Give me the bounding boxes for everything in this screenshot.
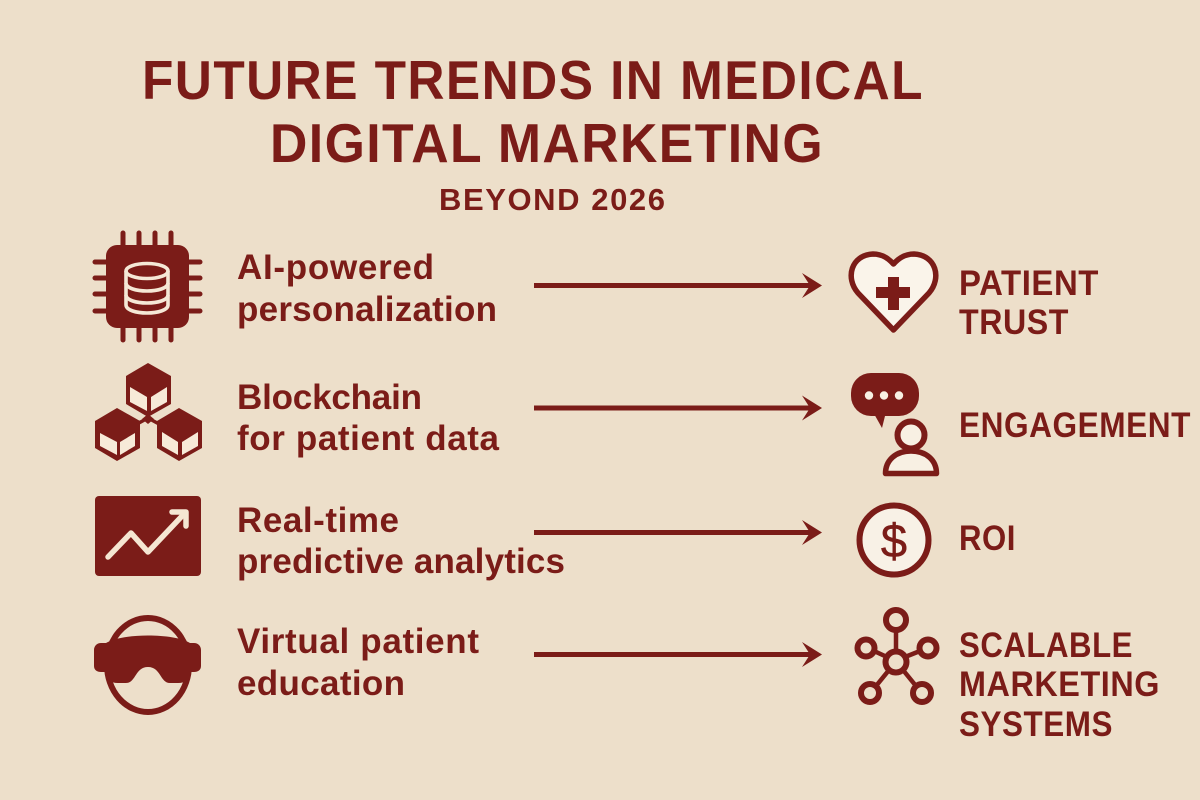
label: blockchain for patient data: for patient data bbox=[237, 419, 500, 458]
label: scalable marketing systems: MARKETING bbox=[959, 665, 1160, 704]
arrow: virtual education to scalable systems bbox=[534, 642, 822, 667]
label: real-time predictive analytics: predictive analytics bbox=[237, 542, 565, 581]
label: AI-powered personalization: personalization bbox=[237, 290, 497, 329]
label: ROI: ROI bbox=[959, 519, 1016, 558]
title bbox=[142, 49, 924, 174]
label: virtual patient education: education bbox=[237, 664, 405, 703]
title: DIGITAL MARKETING bbox=[270, 112, 824, 174]
label: virtual patient education bbox=[237, 622, 479, 703]
label: scalable marketing systems: SYSTEMS bbox=[959, 705, 1113, 744]
label: AI-powered personalization: AI-powered bbox=[237, 248, 434, 287]
label: scalable marketing systems: SCALABLE bbox=[959, 626, 1133, 665]
title: FUTURE TRENDS IN MEDICAL bbox=[142, 49, 924, 111]
label: patient trust bbox=[959, 264, 1099, 342]
icon: speech bubble and person bbox=[851, 373, 936, 474]
icon: blockchain cubes bbox=[95, 363, 202, 461]
label: blockchain for patient data bbox=[237, 378, 500, 458]
label: real-time predictive analytics: Real-time bbox=[237, 501, 399, 540]
label: virtual patient education: Virtual patient bbox=[237, 622, 479, 661]
icon: dollar coin bbox=[860, 506, 928, 574]
arrow: AI to patient trust bbox=[534, 273, 822, 298]
icon: heart with cross bbox=[851, 254, 936, 330]
icon: AI chip with database bbox=[95, 233, 200, 340]
icon: dollar coin: $ bbox=[881, 514, 907, 567]
label: blockchain for patient data: Blockchain bbox=[237, 378, 422, 417]
label: real-time predictive analytics bbox=[237, 501, 565, 581]
label: scalable marketing systems bbox=[959, 626, 1160, 744]
label: patient trust: TRUST bbox=[959, 303, 1069, 342]
label: patient trust: PATIENT bbox=[959, 264, 1099, 303]
arrow: blockchain to engagement bbox=[534, 396, 822, 420]
label: AI-powered personalization bbox=[237, 248, 497, 329]
arrow: analytics to ROI bbox=[534, 520, 822, 545]
subtitle: BEYOND 2026 bbox=[439, 182, 665, 217]
icon: VR headset head bbox=[94, 618, 201, 712]
icon: network nodes bbox=[858, 610, 936, 702]
icon: analytics chart bbox=[95, 496, 201, 576]
